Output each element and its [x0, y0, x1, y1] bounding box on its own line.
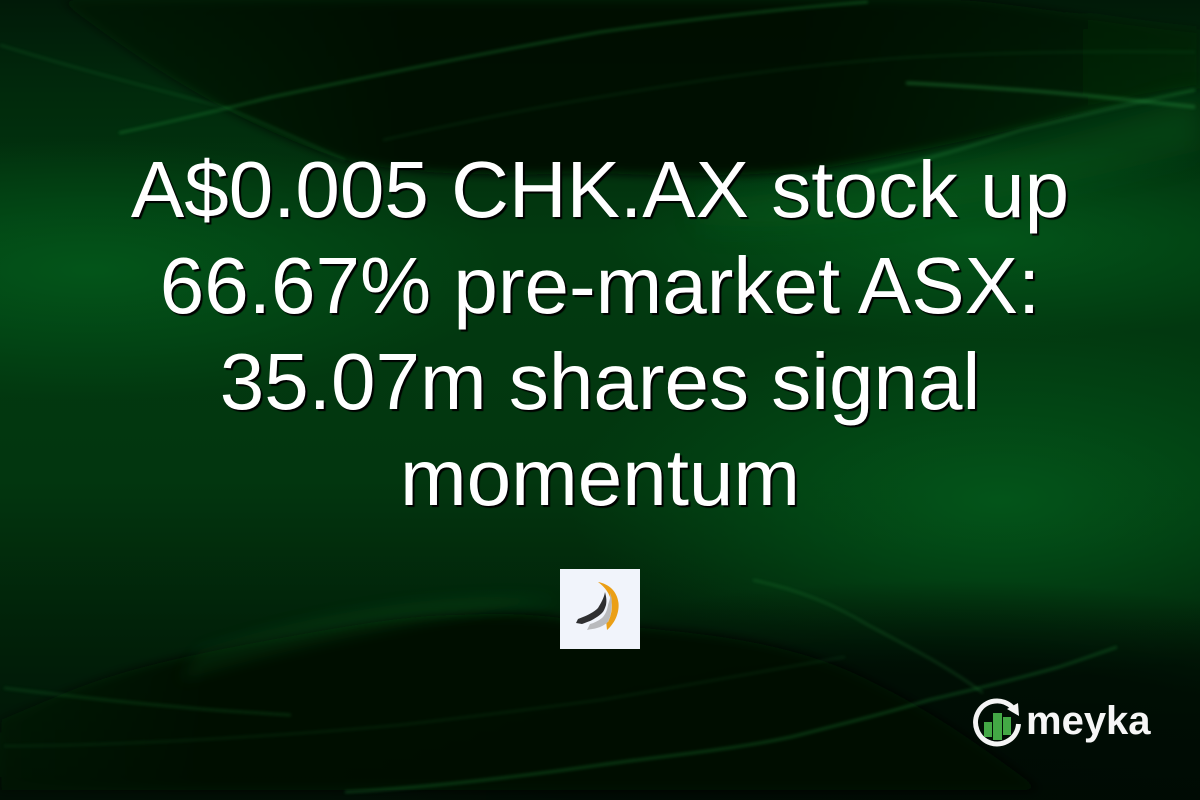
- title: A$0.005 CHK.AX stock up: [131, 145, 1069, 234]
- icon: meyka chart ring: [976, 701, 1019, 744]
- icon: company logo: [560, 569, 640, 649]
- logo: meyka: [973, 698, 1151, 746]
- wordmark: meyka: [1026, 699, 1151, 743]
- title: 66.67% pre-market ASX:: [160, 241, 1040, 330]
- title: [131, 145, 1069, 522]
- title: 35.07m shares signal: [220, 337, 980, 426]
- title: momentum: [400, 433, 800, 522]
